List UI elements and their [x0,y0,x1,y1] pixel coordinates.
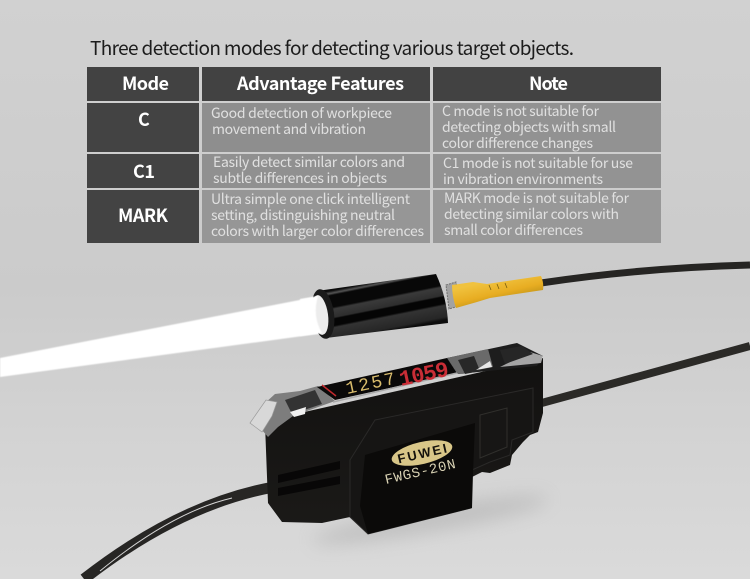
row: MARK mode: MARK mode is not suitable for [444,188,630,208]
header row: Advantage Features [236,70,404,96]
brand badge [389,435,455,471]
row: C mode: Good detection of workpiece [211,103,392,123]
fiber cable: upper right [541,265,750,283]
display edge [333,373,457,402]
row: C1 mode: in vibration environments [443,169,603,189]
light beam [0,297,325,377]
side window [480,408,507,458]
table: detection modes [87,67,661,243]
yellow sleeve [452,276,543,308]
row: C1 mode [87,152,661,189]
model label: FWGS-20N [384,457,457,489]
header row [87,67,661,101]
row: C mode: detecting objects with small [442,117,616,137]
sensor body [265,358,543,534]
top right buttons [447,343,543,374]
row: MARK mode [87,188,661,243]
brand badge: FUWEI [396,441,448,466]
fiber head: black cylinder [300,274,448,340]
sleeve ticks [489,283,507,290]
row: C mode: C mode is not suitable for [442,101,600,121]
fiber cable: lower right [538,346,750,404]
row: MARK mode: setting, distinguishing neutral [211,205,395,225]
fiber head: connector [446,276,543,309]
yellow readout: 1257 [344,370,397,400]
front panel [350,388,533,534]
row: MARK mode: Ultra simple one click intelligent [211,189,411,209]
header row: Note [529,70,568,96]
fiber cable: lower left [84,487,274,579]
red indicator [322,385,336,396]
metal knurl [446,282,459,309]
row: MARK mode: colors with larger color differences [211,221,424,241]
amplifier sensor [250,343,543,534]
title: Three detection modes for detecting various target objects. [90,34,574,61]
transparent cover [262,386,335,437]
header row: Mode [122,70,169,96]
row: C mode: movement and vibration [212,119,366,139]
row: C mode: color difference changes [442,133,593,153]
name plate [360,423,475,534]
row: MARK mode: detecting similar colors with [444,204,619,224]
row: C1 mode: C1 [133,158,155,184]
row: C1 mode: C1 mode is not suitable for use [443,153,633,173]
red readout: 1059 [397,358,451,393]
row: MARK mode: MARK [118,202,169,228]
row: C1 mode: Easily detect similar colors and [213,152,405,172]
row: MARK mode: small color differences [444,220,583,240]
row: C mode: C [138,106,150,132]
row: C1 mode: subtle differences in objects [213,168,387,188]
grip grooves [278,461,340,496]
sensor shadow [310,487,550,553]
row: C mode [87,101,661,153]
display [317,358,457,400]
